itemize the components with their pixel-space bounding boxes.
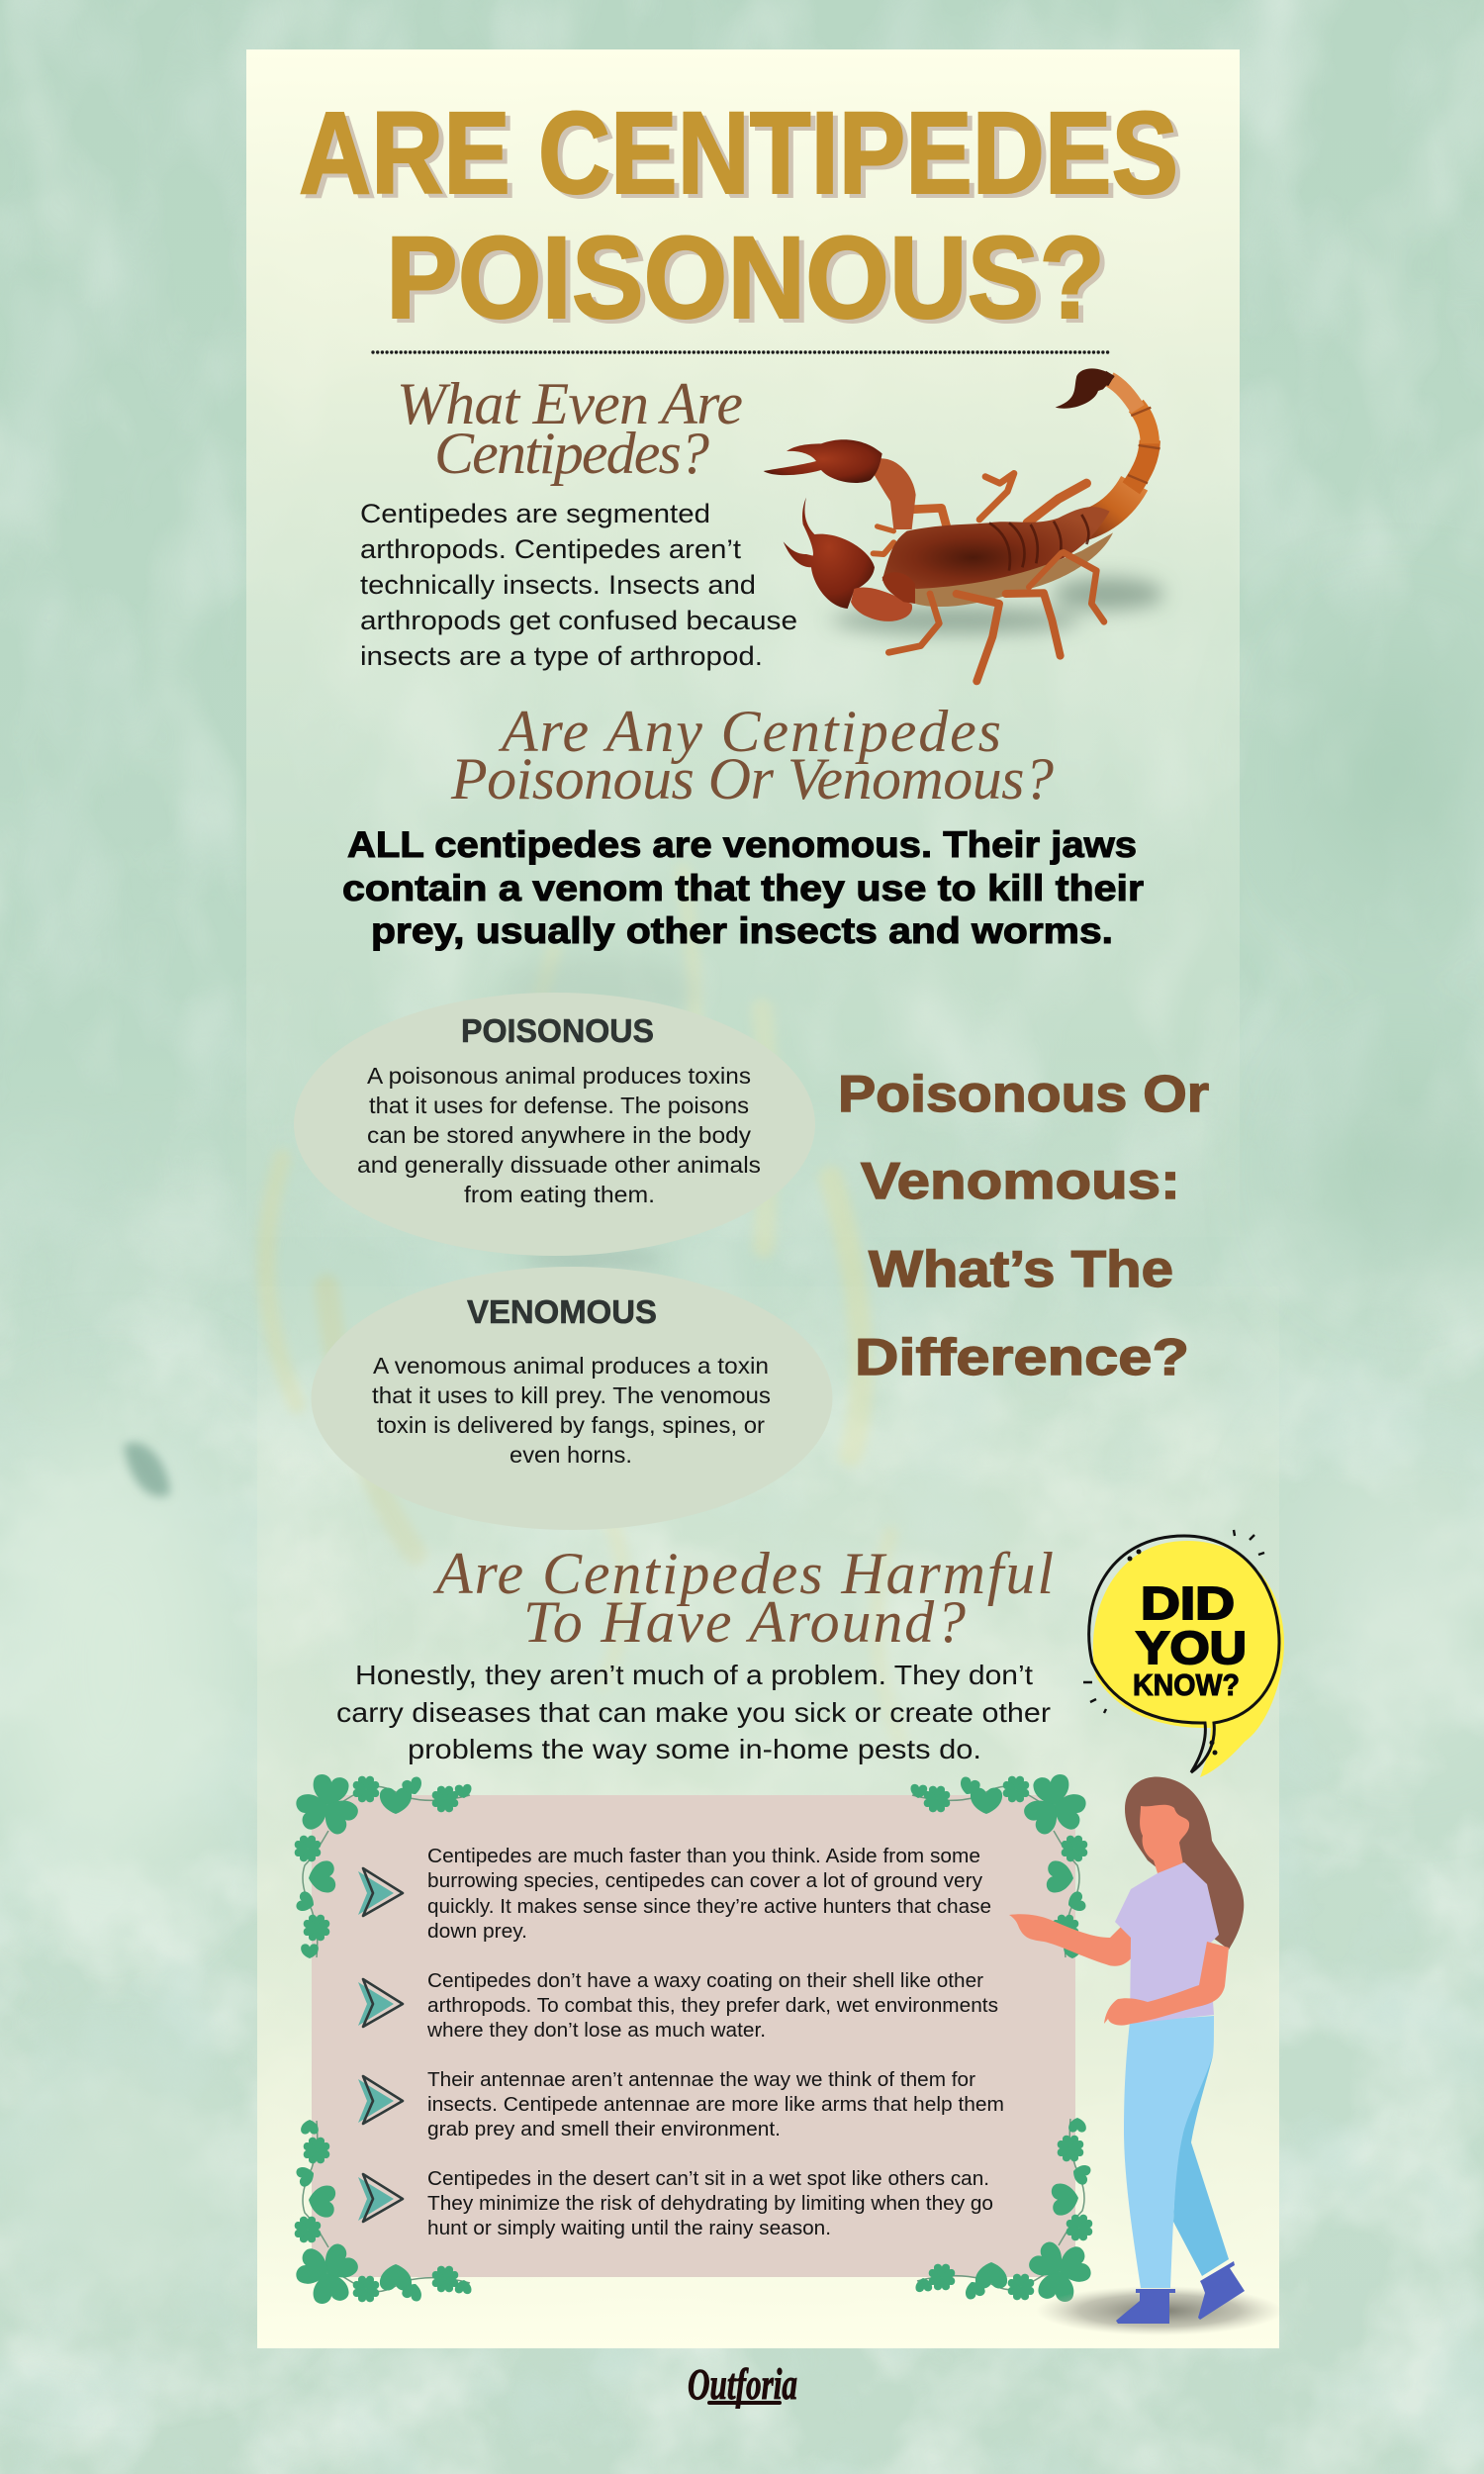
fact text: quickly. It makes sense since they’re active hunters that chase — [427, 1895, 991, 1918]
icon: clover border bottom-right — [915, 2118, 1098, 2306]
arrow icon — [358, 1868, 403, 1916]
bubble text: YOU — [1136, 1622, 1247, 1673]
fact text: They minimize the risk of dehydrating by limiting when they go — [427, 2192, 993, 2215]
shirt — [1115, 1862, 1219, 2024]
panel: poisonous definition — [294, 993, 815, 1256]
text block: centipede definition: insects are a type of arthropod. — [360, 641, 763, 671]
fact text — [427, 2068, 1004, 2141]
poisonous text: and generally dissuade other animals — [357, 1152, 761, 1178]
callout: all centipedes are venomous: ALL centipedes are venomous. Their jaws — [347, 824, 1137, 865]
venomous text: toxin is delivered by fangs, spines, or — [377, 1412, 765, 1438]
callout: all centipedes are venomous — [342, 824, 1144, 951]
venomous text — [372, 1353, 771, 1468]
fact text: Their antennae aren’t antennae the way we think of them for — [427, 2068, 975, 2091]
fact text: Centipedes don’t have a waxy coating on their shell like other — [427, 1969, 983, 1992]
panel: facts box — [312, 1795, 1075, 2277]
heading: are centipedes harmful: To Have Around? — [523, 1589, 966, 1655]
text block: harm explanation: problems the way some in-home pests do. — [408, 1734, 981, 1764]
fact text: down prey. — [427, 1920, 527, 1943]
poisonous text: A poisonous animal produces toxins — [367, 1063, 751, 1089]
scorpion upper legs — [874, 473, 1086, 554]
heading: are any centipedes poisonous: Are Any Centipedes — [498, 699, 1001, 764]
scorpion lower claw arm — [851, 588, 912, 621]
bubble text: KNOW? — [1133, 1667, 1240, 1702]
callout: all centipedes are venomous: contain a venom that they use to kill their — [342, 868, 1144, 908]
heading: are any centipedes poisonous: Poisonous Or Venomous? — [450, 746, 1054, 811]
lowered arm — [1104, 1942, 1229, 2026]
arrow icon — [358, 2174, 403, 2222]
scorpion lower legs — [888, 552, 1104, 681]
text block: centipede definition: arthropods get confused because — [360, 606, 797, 635]
burst marks — [1083, 1530, 1264, 1713]
title: ARE CENTIPEDES — [304, 92, 1183, 223]
poisonous label: POISONOUS — [461, 1012, 654, 1049]
faint creature image behind content — [266, 871, 900, 1742]
fact text: arthropods. To combat this, they prefer dark, wet environments — [427, 1994, 998, 2017]
text block: harm explanation: carry diseases that can make you sick or create other — [336, 1697, 1051, 1728]
poisonous text: can be stored anywhere in the body — [367, 1122, 752, 1148]
scorpion head — [882, 572, 915, 604]
fact text — [427, 2167, 993, 2239]
fact 4 — [358, 2167, 993, 2239]
illustration: woman pointing — [1009, 1777, 1283, 2335]
heading: are centipedes harmful: Are Centipedes Harmful — [432, 1541, 1054, 1606]
fact text: grab prey and smell their environment. — [427, 2118, 781, 2141]
front leg pants — [1124, 2016, 1214, 2288]
scorpion tail — [1081, 376, 1160, 526]
title — [299, 88, 1183, 347]
text block: harm explanation: Honestly, they aren’t much of a problem. They don’t — [355, 1660, 1033, 1690]
icon: clover border top-left — [289, 1770, 472, 1958]
heading: what even are centipedes — [397, 371, 743, 486]
title: POISONOUS? — [391, 217, 1110, 347]
title: POISONOUS? — [386, 213, 1105, 343]
heading: are any centipedes poisonous — [450, 699, 1054, 811]
text block: harm explanation — [336, 1660, 1051, 1764]
poisonous text: from eating them. — [464, 1182, 655, 1207]
fact text: where they don’t lose as much water. — [426, 2019, 766, 2042]
heading: poisonous or venomous difference: Venomous: — [861, 1153, 1180, 1210]
heading: what even are centipedes: Centipedes? — [434, 421, 709, 486]
pointing arm — [1009, 1914, 1138, 1966]
fact text: burrowing species, centipedes can cover a lot of ground very — [427, 1869, 983, 1892]
venomous text: that it uses to kill prey. The venomous — [372, 1382, 771, 1408]
text block: centipede definition — [360, 499, 797, 671]
scorpion lower claw — [784, 498, 875, 609]
back leg — [1173, 2055, 1229, 2276]
fact text — [426, 1969, 998, 2042]
poisonous text — [357, 1063, 761, 1207]
ground shadow — [1036, 2286, 1283, 2335]
title: ARE CENTIPEDES — [299, 88, 1178, 219]
scorpion upper claw — [764, 439, 882, 483]
arrow icon — [358, 2076, 403, 2124]
heading: poisonous or venomous difference: What’s The — [869, 1241, 1173, 1298]
fact text — [427, 1845, 991, 1943]
fact text: Centipedes in the desert can’t sit in a wet spot like others can. — [427, 2167, 989, 2190]
heading: poisonous or venomous difference: Difference? — [855, 1329, 1189, 1386]
venomous label: VENOMOUS — [467, 1293, 657, 1330]
heading: what even are centipedes: What Even Are — [397, 371, 743, 436]
bubble text — [1133, 1577, 1247, 1702]
fact text: insects. Centipede antennae are more like arms that help them — [427, 2093, 1004, 2116]
panel: upper cream card — [246, 49, 1240, 1237]
dotted divider — [373, 350, 1112, 354]
icon: scorpion — [764, 368, 1164, 681]
venomous text: A venomous animal produces a toxin — [373, 1353, 769, 1379]
icon: clover border bottom-left — [289, 2120, 472, 2308]
boots — [1116, 2289, 1175, 2324]
hair back — [1125, 1777, 1244, 1950]
bubble text: DID — [1141, 1577, 1235, 1629]
fact 1 — [358, 1845, 991, 1943]
scorpion stinger — [1056, 368, 1115, 409]
speech bubble: did you know — [1083, 1530, 1284, 1777]
fact 3 — [358, 2068, 1004, 2141]
scorpion body — [882, 507, 1110, 589]
fact 2 — [358, 1969, 998, 2042]
scorpion belly — [915, 532, 1113, 607]
face — [1140, 1805, 1189, 1873]
text block: centipede definition: arthropods. Centipedes aren’t — [360, 534, 742, 564]
scorpion upper claw arm — [873, 458, 916, 529]
panel: venomous definition — [311, 1267, 833, 1530]
poisonous text: that it uses for defense. The poisons — [369, 1093, 749, 1118]
venomous text: even horns. — [510, 1442, 632, 1468]
text block: centipede definition: technically insects. Insects and — [360, 570, 756, 600]
callout: all centipedes are venomous: prey, usually other insects and worms. — [371, 910, 1113, 951]
icon: clover border top-right — [910, 1770, 1093, 1958]
heading: are centipedes harmful — [432, 1541, 1054, 1655]
arrow icon — [358, 1979, 403, 2027]
scorpion ground shadow — [831, 577, 1164, 633]
heading: poisonous or venomous difference: Poisonous Or — [838, 1066, 1209, 1123]
text block: centipede definition: Centipedes are segmented — [360, 499, 710, 528]
fact text: Centipedes are much faster than you think. Aside from some — [427, 1845, 980, 1867]
heading: poisonous or venomous difference — [838, 1066, 1209, 1386]
panel: lower cream card — [257, 1286, 1279, 2348]
fact text: hunt or simply waiting until the rainy season. — [427, 2217, 831, 2239]
logo: Outforia: Outforia — [688, 2360, 797, 2409]
